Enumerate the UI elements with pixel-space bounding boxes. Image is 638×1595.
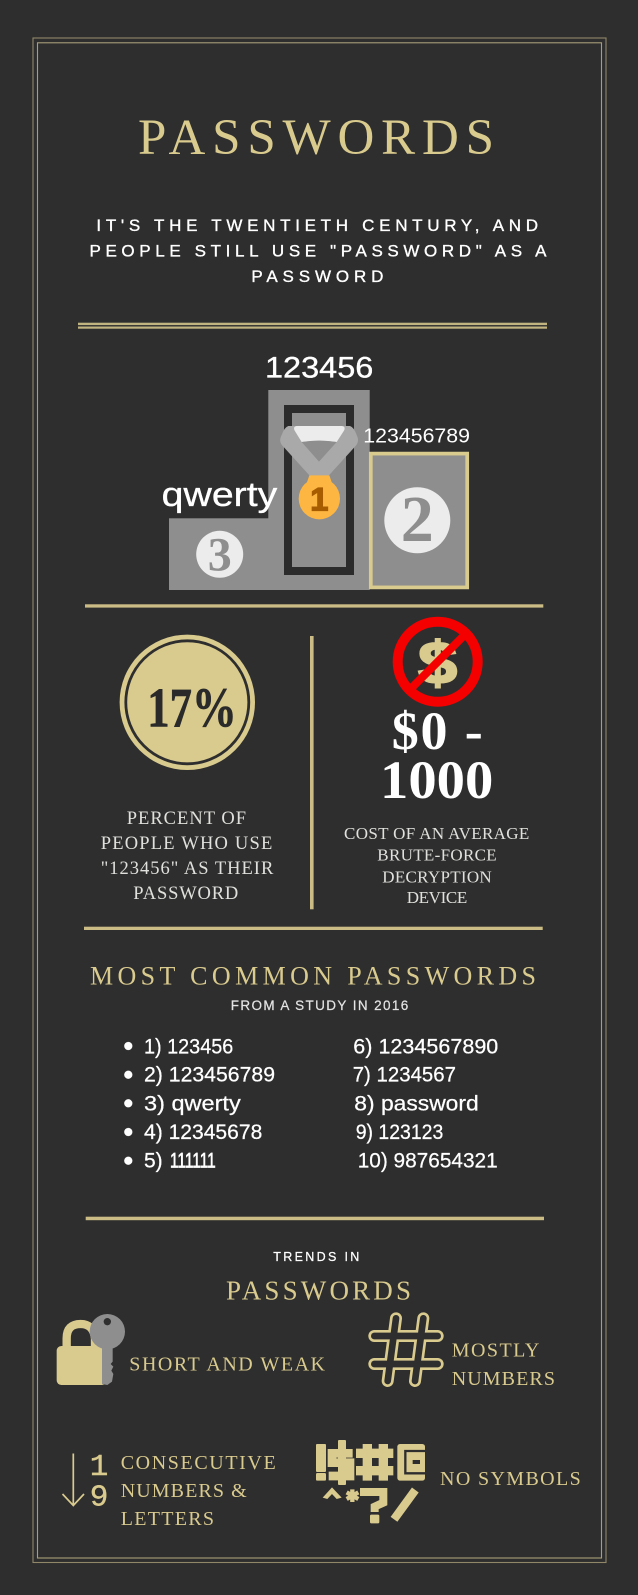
trend label (452, 1340, 555, 1390)
list: passwords 1 to 5: 111111 (170, 1150, 216, 1173)
label: qwerty: qwerty (162, 476, 277, 514)
trend label: NUMBERS & (121, 1480, 247, 1502)
first place podium (268, 390, 370, 590)
list: passwords 6 to 10: 7) 1234567 (353, 1063, 456, 1086)
icon: one to nine arrow: 9 (90, 1481, 108, 1516)
cost caption: DEVICE (407, 888, 467, 907)
list: passwords 1 to 5: 4) 12345678 (144, 1121, 262, 1144)
label: 123456789: 123456789 (363, 426, 470, 448)
trend label (121, 1452, 276, 1530)
trend: consecutive (62, 1450, 276, 1530)
list: passwords 6 to 10: 9) 123123 (356, 1121, 443, 1144)
trend label: NO SYMBOLS (440, 1468, 581, 1490)
stat caption: PEOPLE WHO USE (101, 834, 272, 854)
trend label: NUMBERS (452, 1368, 555, 1390)
cost caption: COST OF AN AVERAGE (344, 824, 529, 843)
list: passwords 1 to 5: 5) (144, 1150, 163, 1173)
list: passwords 6 to 10 (353, 1035, 498, 1173)
stat caption: PERCENT OF (127, 809, 246, 829)
badge (120, 635, 255, 770)
second place podium (371, 454, 467, 587)
list: passwords 1 to 5 (124, 1035, 275, 1173)
trend label: SHORT AND WEAK (129, 1354, 326, 1376)
list: passwords 1 to 5: 2) 123456789 (144, 1063, 275, 1086)
trend label: MOSTLY (452, 1340, 539, 1362)
icon: gold medal (280, 426, 358, 519)
cost figure (380, 701, 493, 810)
heading: passwords: PASSWORDS (226, 1275, 411, 1305)
third place podium: 3 (208, 528, 232, 582)
trend label: LETTERS (121, 1508, 214, 1530)
list: passwords 1 to 5: 1) 123456 (144, 1035, 233, 1058)
icon: no dollar sign: $ (418, 630, 457, 696)
label: 123456: 123456 (265, 351, 373, 384)
subtitle (90, 216, 547, 286)
list: passwords 6 to 10: 10) 987654321 (358, 1150, 498, 1173)
trend label: CONSECUTIVE (121, 1452, 276, 1474)
cost figure: $0 - (392, 701, 483, 761)
subheading: FROM A STUDY IN 2016 (231, 998, 408, 1013)
list: passwords 6 to 10: 6) 1234567890 (353, 1035, 498, 1058)
icon: gold medal: 1 (310, 480, 328, 517)
badge: 17% (147, 678, 237, 740)
cost caption: BRUTE-FORCE (377, 845, 497, 864)
heading: most common passwords: MOST COMMON PASSWORDS (90, 962, 536, 991)
stat caption: "123456" AS THEIR (101, 859, 274, 879)
list: passwords 6 to 10: 8) password (354, 1092, 479, 1115)
icon: hash outline (374, 1318, 438, 1381)
heading: trends in: TRENDS IN (273, 1250, 359, 1264)
trend: mostly numbers (374, 1318, 555, 1390)
subtitle: PASSWORD (251, 267, 383, 286)
subtitle: PEOPLE STILL USE "PASSWORD" AS A (90, 242, 547, 260)
icon: symbols (316, 1440, 425, 1523)
stat: cost (344, 622, 529, 907)
subtitle: IT'S THE TWENTIETH CENTURY, AND (96, 216, 538, 235)
icon: one to nine arrow: 1 (90, 1450, 108, 1485)
stat caption: PASSWORD (133, 884, 238, 904)
title: PASSWORDS (138, 110, 494, 166)
icon: lock and key (57, 1314, 125, 1385)
cost caption (344, 824, 529, 907)
stat caption (101, 809, 274, 904)
trend: short and weak (57, 1314, 326, 1385)
third place podium (169, 518, 268, 590)
cost figure: 1000 (380, 750, 493, 810)
list: passwords 1 to 5: 3) qwerty (144, 1092, 241, 1115)
icon: one to nine arrow (62, 1450, 108, 1516)
second place podium: 2 (401, 483, 434, 556)
podium chart (162, 351, 470, 590)
stat: 17 percent (101, 635, 274, 904)
icon: no dollar sign (398, 622, 478, 702)
cost caption: DECRYPTION (382, 867, 492, 886)
trend: no symbols (316, 1440, 581, 1523)
